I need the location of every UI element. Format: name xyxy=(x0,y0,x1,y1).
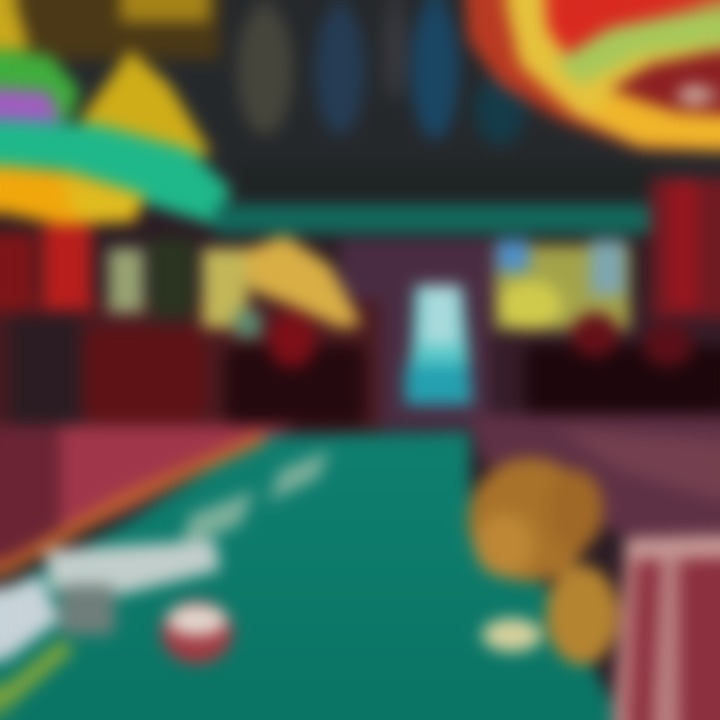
back wall xyxy=(0,240,720,430)
striped box xyxy=(612,535,720,720)
curtains: left red xyxy=(0,225,194,318)
carpet: left pink xyxy=(0,425,300,570)
lamp: centre yellow xyxy=(202,235,362,338)
chip: red and white xyxy=(161,600,233,664)
chips: white pile xyxy=(0,540,220,665)
window: right yellow and blue xyxy=(495,240,630,330)
chip stack: gold xyxy=(468,458,618,665)
dark seating left xyxy=(10,312,365,515)
canopy: left rainbow xyxy=(0,0,232,225)
ceiling xyxy=(0,0,720,180)
canopy: right striped xyxy=(465,0,720,152)
table markings xyxy=(0,450,330,715)
curtains: right red xyxy=(650,178,720,318)
carpet: right pink xyxy=(470,415,720,570)
table edge: orange rail xyxy=(0,431,266,578)
teal beam xyxy=(215,165,655,234)
glowing doorway xyxy=(405,285,472,405)
table: green felt xyxy=(0,432,620,720)
dark seating right xyxy=(525,313,720,415)
